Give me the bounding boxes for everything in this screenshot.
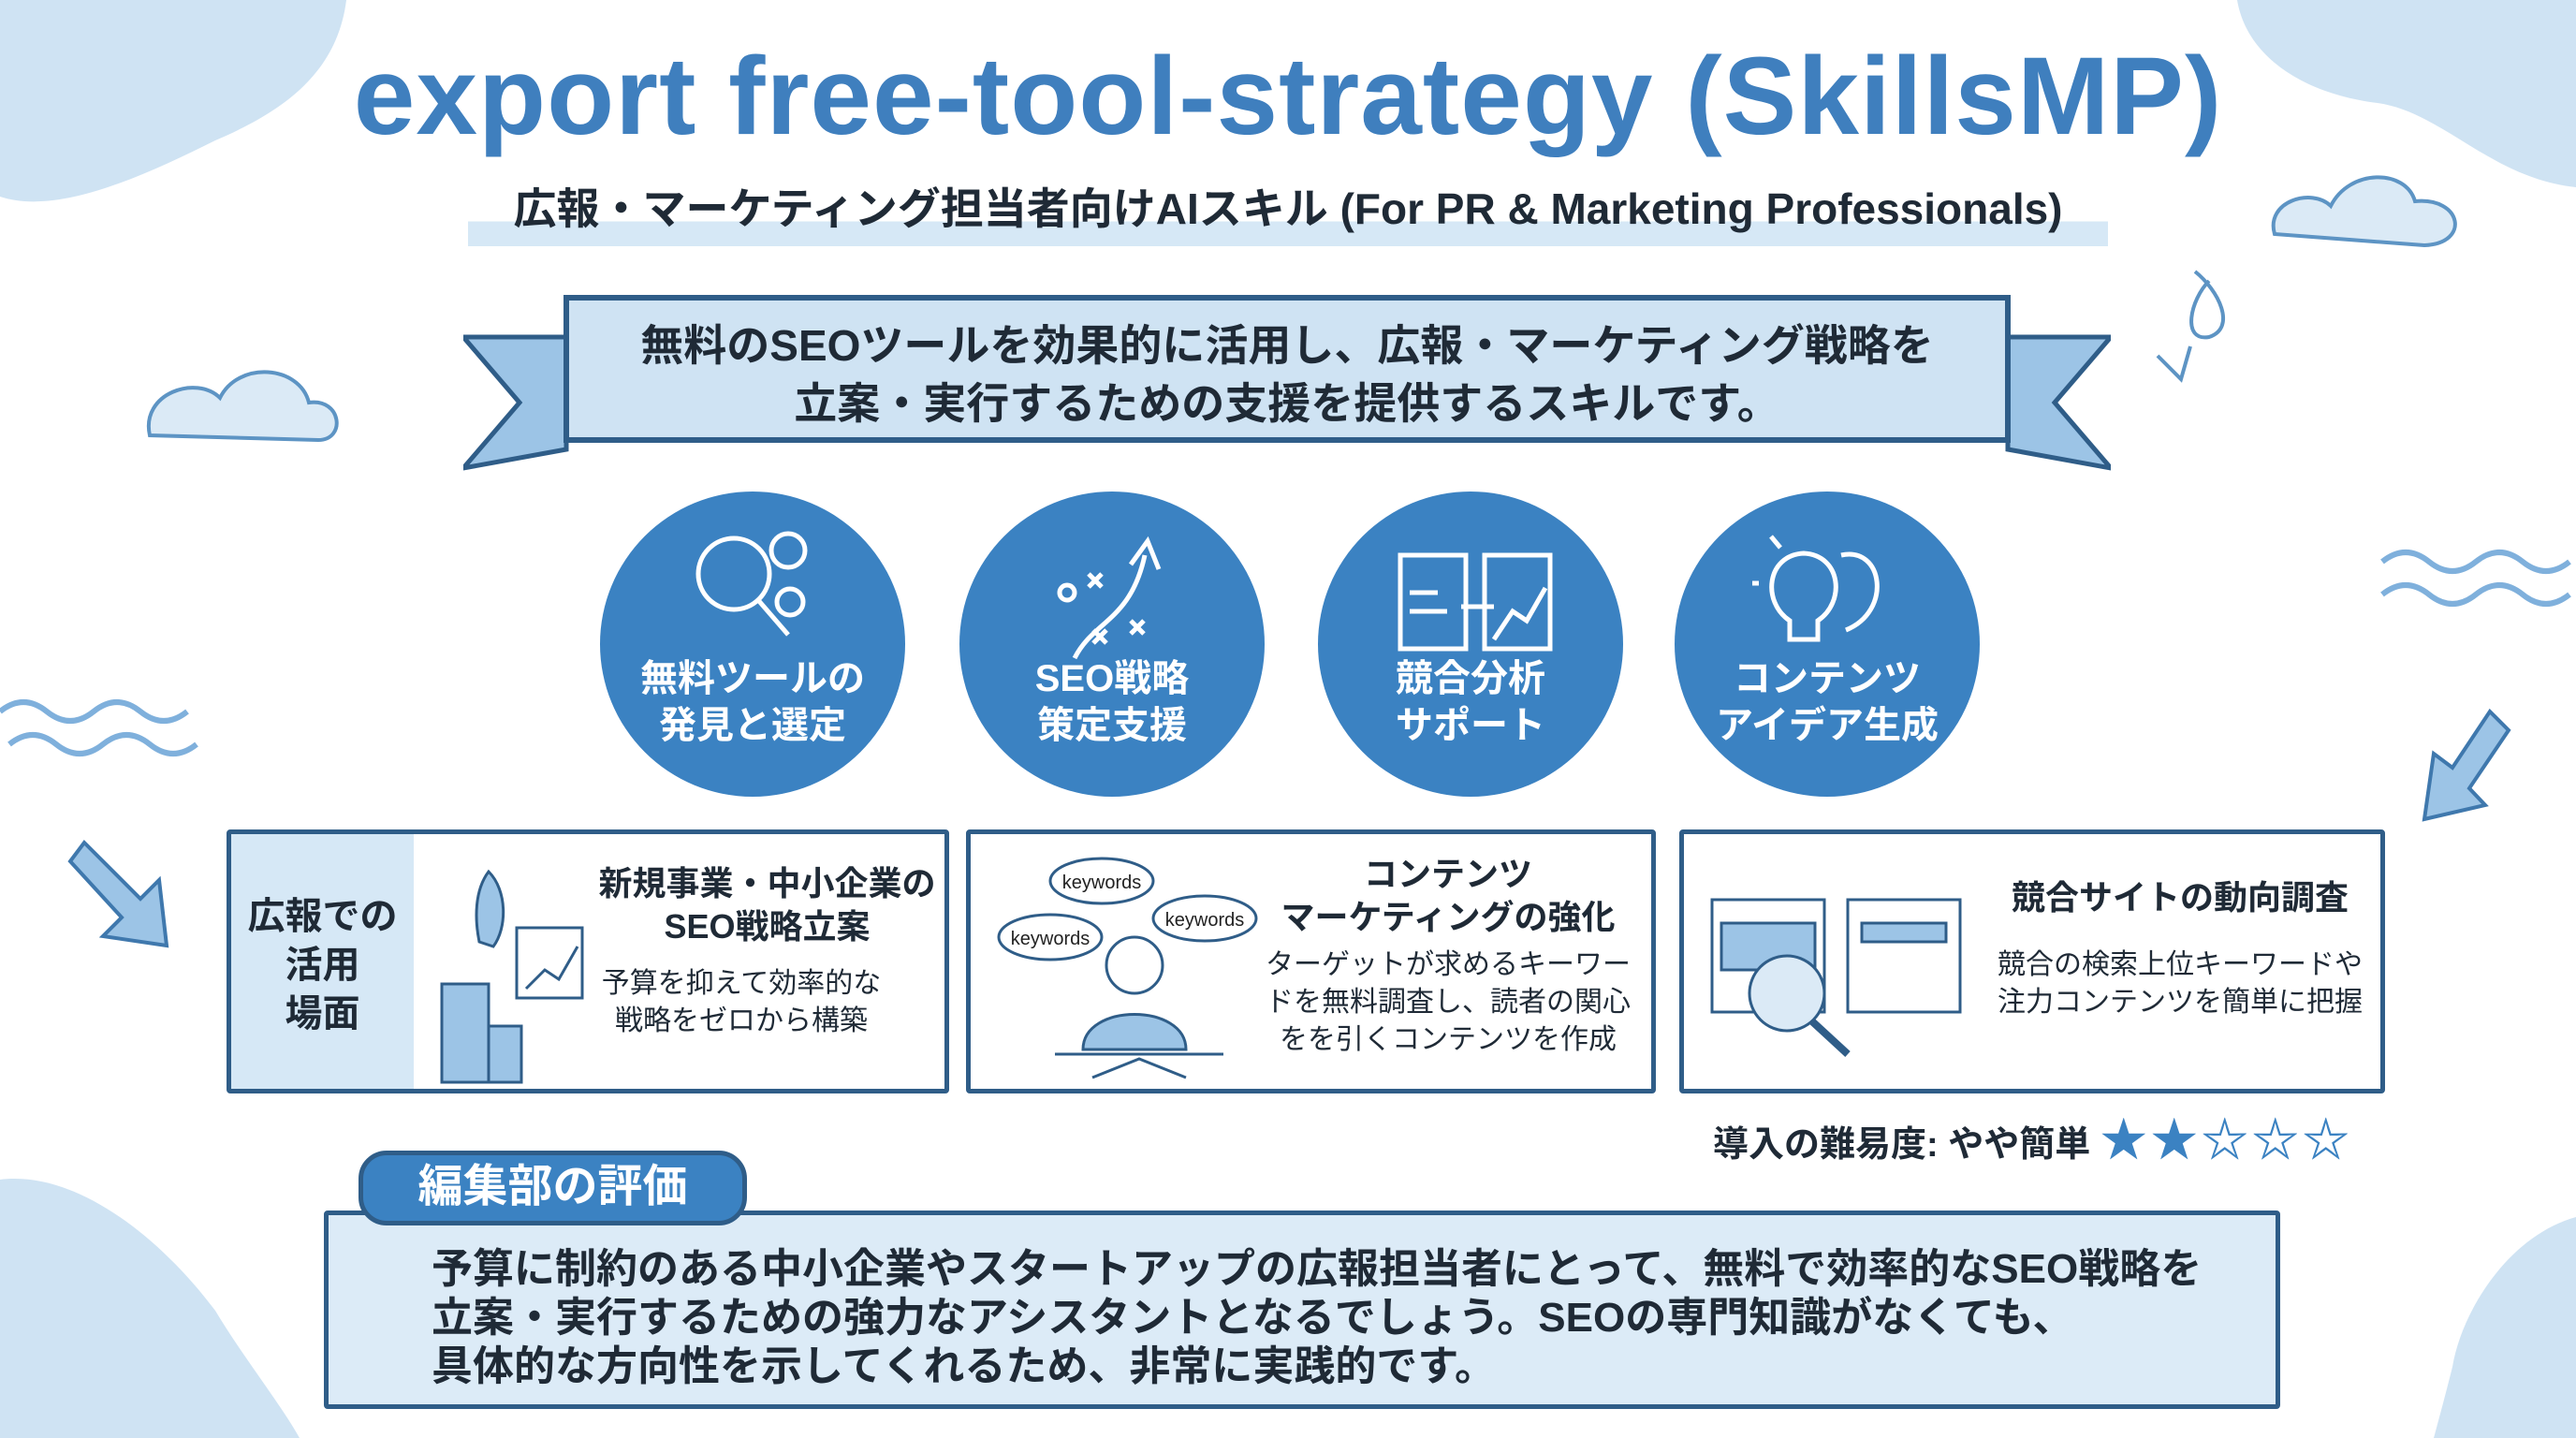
card: 競合サイトの動向調査: 競合の検索上位キーワードや <box>1998 949 2363 980</box>
circle: SEO戦略策定支援: SEO戦略 <box>1035 658 1189 699</box>
circle: 無料ツールの発見と選定: 発見と選定 <box>659 705 846 746</box>
title: export free-tool-strategy (SkillsMP) <box>354 35 2222 158</box>
label strip: 広報での活用場面 <box>231 834 414 1089</box>
circle: 無料ツールの発見と選定 <box>600 492 905 797</box>
card: コンテンツマーケティングの強化: マーケティングの強化 <box>1281 898 1616 936</box>
circle: SEO戦略策定支援: 策定支援 <box>1037 705 1187 746</box>
circle: 競合分析サポート: 競合分析 <box>1396 658 1545 699</box>
card: コンテンツマーケティングの強化: をを引くコンテンツを作成 <box>1280 1024 1617 1055</box>
evaluation panel: 具体的な方向性を示してくれるため、非常に実践的です。 <box>432 1343 1496 1389</box>
evaluation panel <box>324 1211 2280 1409</box>
circle: コンテンツアイデア生成: アイデア生成 <box>1716 705 1939 746</box>
circle: 無料ツールの発見と選定: 無料ツールの <box>640 658 865 699</box>
evaluation panel: 予算に制約のある中小企業やスタートアップの広報担当者にとって、無料で効率的なSEO戦略を <box>432 1246 2202 1292</box>
evaluation panel: 立案・実行するための強力なアシスタントとなるでしょう。SEOの専門知識がなくても、 <box>432 1295 2073 1341</box>
card: 新規事業・中小企業のSEO戦略立案: SEO戦略立案 <box>664 907 871 946</box>
card: 新規事業・中小企業のSEO戦略立案: 戦略をゼロから構築 <box>615 1005 868 1036</box>
label strip: 広報での活用場面: 場面 <box>285 993 359 1034</box>
card: 競合サイトの動向調査: 競合サイトの動向調査 <box>2012 878 2349 917</box>
evaluation tab: 編集部の評価 <box>359 1151 747 1225</box>
difficulty rating: 導入の難易度: やや簡単 ★★☆☆☆ <box>1713 1114 2353 1167</box>
banner ribbon <box>463 295 2111 470</box>
card: 新規事業・中小企業のSEO戦略立案: 予算を抑えて効率的な <box>602 968 881 999</box>
card: 新規事業・中小企業のSEO戦略立案 <box>227 829 949 1093</box>
card: 競合サイトの動向調査: 注力コンテンツを簡単に把握 <box>1998 987 2363 1018</box>
card: コンテンツマーケティングの強化 <box>966 829 1656 1093</box>
icon: browser windows with magnifier <box>1711 899 1962 1057</box>
label strip: 広報での活用場面: 活用 <box>285 945 359 986</box>
icon: person with keyword bubbles: keywords <box>1062 873 1141 893</box>
subtitle: 広報・マーケティング担当者向けAIスキル (For PR & Marketing Professionals) <box>513 184 2063 233</box>
circle: SEO戦略策定支援 <box>959 492 1265 797</box>
label strip: 広報での活用場面: 広報での <box>247 896 397 937</box>
circle: コンテンツアイデア生成: コンテンツ <box>1734 658 1921 699</box>
icon: person with keyword bubbles: keywords <box>1165 910 1244 931</box>
icon: person with keyword bubbles: keywords <box>1011 929 1090 949</box>
card: 新規事業・中小企業のSEO戦略立案: 新規事業・中小企業の <box>598 864 936 902</box>
banner ribbon: 無料のSEOツールを効果的に活用し、広報・マーケティング戦略を <box>640 321 1934 370</box>
card: コンテンツマーケティングの強化: コンテンツ <box>1364 855 1532 893</box>
circle: 競合分析サポート <box>1318 492 1623 797</box>
circle: コンテンツアイデア生成 <box>1675 492 1980 797</box>
icon: rocket and building <box>440 869 584 1084</box>
card: コンテンツマーケティングの強化: ターゲットが求めるキーワー <box>1266 949 1631 980</box>
card: コンテンツマーケティングの強化: ドを無料調査し、読者の関心 <box>1266 987 1631 1018</box>
icon: person with keyword bubbles <box>998 858 1258 1078</box>
evaluation tab: 編集部の評価: 編集部の評価 <box>417 1162 687 1211</box>
card: 競合サイトの動向調査 <box>1679 829 2385 1093</box>
circle: 競合分析サポート: サポート <box>1396 705 1545 746</box>
banner ribbon: 立案・実行するための支援を提供するスキルです。 <box>794 379 1780 428</box>
